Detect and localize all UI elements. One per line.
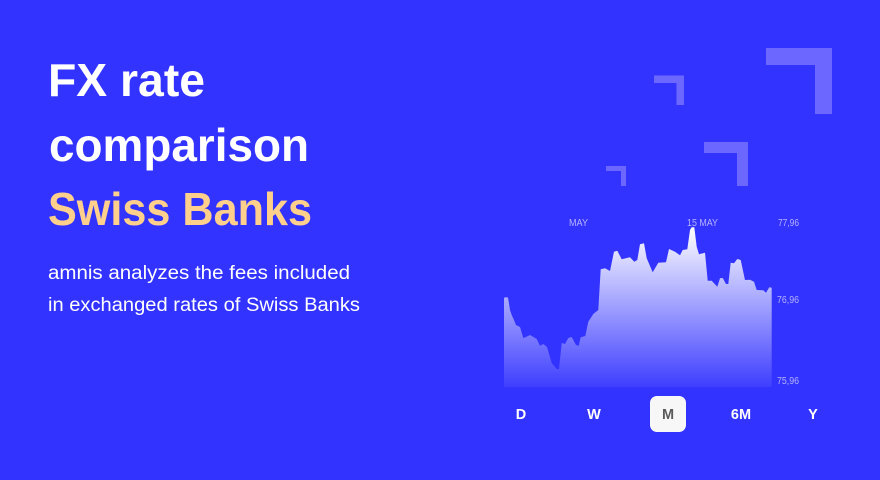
description line 1: amnis analyzes the fees included: [48, 263, 350, 284]
bracket: small: [654, 76, 684, 105]
bracket: large: [766, 48, 832, 114]
option: M (selected): M: [662, 407, 674, 423]
decorative corner brackets: [606, 48, 832, 186]
option: D: D: [516, 407, 526, 423]
option: Y: Y: [808, 407, 818, 423]
time range selector: [516, 396, 818, 432]
option: M (selected): [650, 396, 686, 432]
bracket: tiny: [606, 166, 626, 186]
area series: [504, 227, 772, 387]
x axis label: 15 MAY: 15 MAY: [687, 218, 718, 229]
bracket: medium: [704, 142, 748, 186]
title line: comparison: comparison: [49, 119, 309, 171]
option: 6M: 6M: [731, 407, 751, 423]
option: W: W: [587, 407, 601, 423]
y axis label: 75,96: 75,96: [777, 376, 799, 387]
heading: [48, 54, 312, 235]
description text: [48, 263, 360, 316]
x axis label: MAY: MAY: [569, 218, 588, 229]
title line: FX rate: FX rate: [48, 54, 205, 106]
y axis label: 77,96: 77,96: [778, 218, 799, 229]
y axis label: 76,96: 76,96: [777, 295, 799, 306]
area chart: [504, 218, 799, 387]
description line 2: in exchanged rates of Swiss Banks: [48, 295, 360, 316]
title line: Swiss Banks: Swiss Banks: [48, 183, 312, 235]
